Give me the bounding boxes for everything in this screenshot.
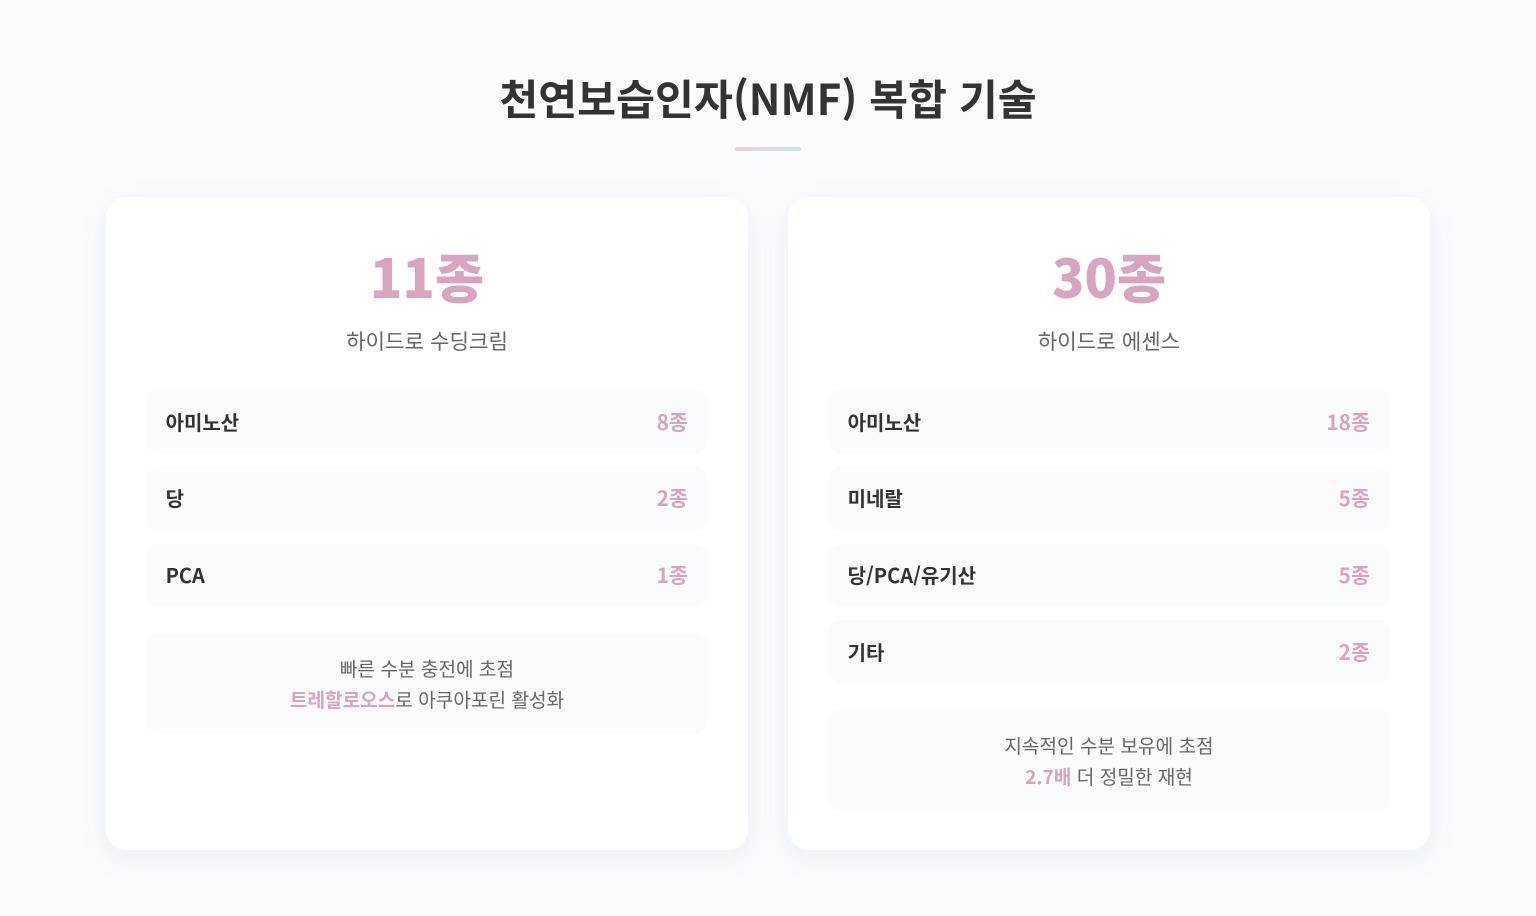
- note: lasting moisture: 2.7배 더 정밀한 재현: [1025, 762, 1193, 790]
- row: sugars: [146, 467, 708, 530]
- product name: 하이드로 수딩크림: [346, 324, 508, 356]
- row: PCA: PCA: [166, 560, 205, 589]
- title: 천연보습인자(NMF) 복합 기술: [499, 67, 1037, 128]
- panel: hydro essence: [788, 197, 1430, 850]
- row: sugars: 2종: [657, 482, 688, 512]
- row: PCA: 1종: [657, 559, 688, 589]
- row: amino acids: 8종: [657, 406, 688, 436]
- note: fast hydration: 트레할로오스로 아쿠아포린 활성화: [290, 685, 564, 713]
- note: fast hydration: [146, 633, 708, 733]
- row: amino acids: 아미노산: [166, 406, 239, 436]
- row: amino acids: [828, 390, 1390, 453]
- note: fast hydration: 빠른 수분 충전에 초점: [340, 654, 514, 682]
- row: sugars, PCA, organic acids: 5종: [1339, 559, 1370, 589]
- big number: 30 types: 30종: [1052, 236, 1166, 314]
- row: minerals: [828, 467, 1390, 530]
- row: sugars, PCA, organic acids: 당/PCA/유기산: [848, 560, 976, 589]
- row: amino acids: [146, 390, 708, 453]
- row: other: [828, 620, 1390, 683]
- row: other: 기타: [848, 637, 884, 666]
- row: minerals: 5종: [1339, 482, 1370, 512]
- big number: 11 types: 11종: [370, 236, 484, 314]
- panel: hydro soothing cream: [106, 197, 748, 850]
- row: sugars, PCA, organic acids: [828, 544, 1390, 607]
- row: sugars: 당: [166, 483, 184, 512]
- row: minerals: 미네랄: [848, 483, 903, 512]
- title underline: [735, 147, 801, 151]
- note: lasting moisture: 지속적인 수분 보유에 초점: [1004, 731, 1214, 759]
- row: other: 2종: [1339, 636, 1370, 666]
- note: lasting moisture: [828, 710, 1390, 810]
- product name: 하이드로 에센스: [1038, 324, 1180, 356]
- row: amino acids: 18종: [1326, 406, 1370, 436]
- row: amino acids: 아미노산: [848, 406, 921, 436]
- row: PCA: [146, 544, 708, 607]
